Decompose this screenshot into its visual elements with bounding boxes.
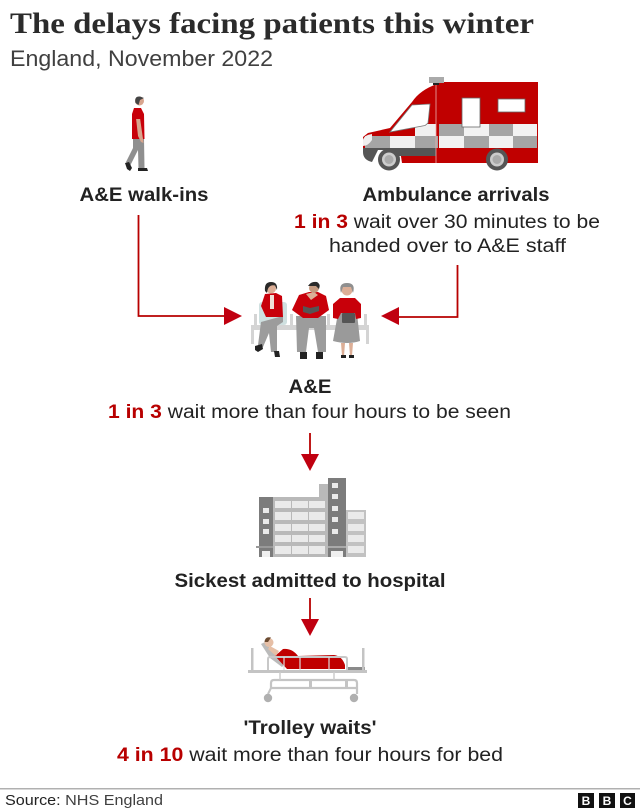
label: Trolley waits: 'Trolley waits' — [244, 718, 376, 739]
icon: hospital building — [256, 478, 366, 557]
arrow: hospital to trolley — [301, 598, 319, 636]
icon: walking person — [125, 96, 148, 171]
arrow: A&E to hospital — [301, 433, 319, 471]
source: Source: NHS England — [5, 792, 163, 809]
footer rule — [0, 788, 640, 790]
subtitle: England, November 2022 — [10, 46, 273, 71]
text: A&E wait statistic: 1 in 3 wait more than four hours to be seen — [108, 402, 511, 423]
label: Sickest admitted to hospital: Sickest admitted to hospital — [174, 571, 446, 592]
BBC logo — [578, 793, 635, 808]
person: seated left — [255, 282, 283, 357]
arrow: ambulance to A&E — [381, 265, 458, 325]
icon: patient on hospital trolley — [248, 637, 367, 702]
icon: ambulance — [363, 77, 538, 170]
BBC logo: B — [582, 794, 591, 808]
text: trolley wait statistic: 4 in 10 wait more than four hours for bed — [117, 745, 503, 766]
label: A&E walk-ins: A&E walk-ins — [80, 185, 208, 206]
BBC logo: B — [603, 794, 612, 808]
text: ambulance handover statistic — [294, 212, 600, 257]
label: Ambulance arrivals: Ambulance arrivals — [362, 185, 550, 206]
label: A&E: A&E — [288, 377, 332, 398]
text: ambulance handover statistic: 1 in 3 wait over 30 minutes to be — [294, 212, 600, 233]
arrow: walk-ins to A&E — [138, 215, 242, 325]
person: seated centre with book — [292, 282, 329, 359]
text: ambulance handover statistic: handed over to A&E staff — [329, 236, 567, 257]
person: seated right with tablet — [333, 283, 361, 358]
icon: people waiting on seats — [251, 282, 369, 359]
BBC logo: C — [623, 794, 632, 808]
title: The delays facing patients this winter — [10, 7, 534, 40]
